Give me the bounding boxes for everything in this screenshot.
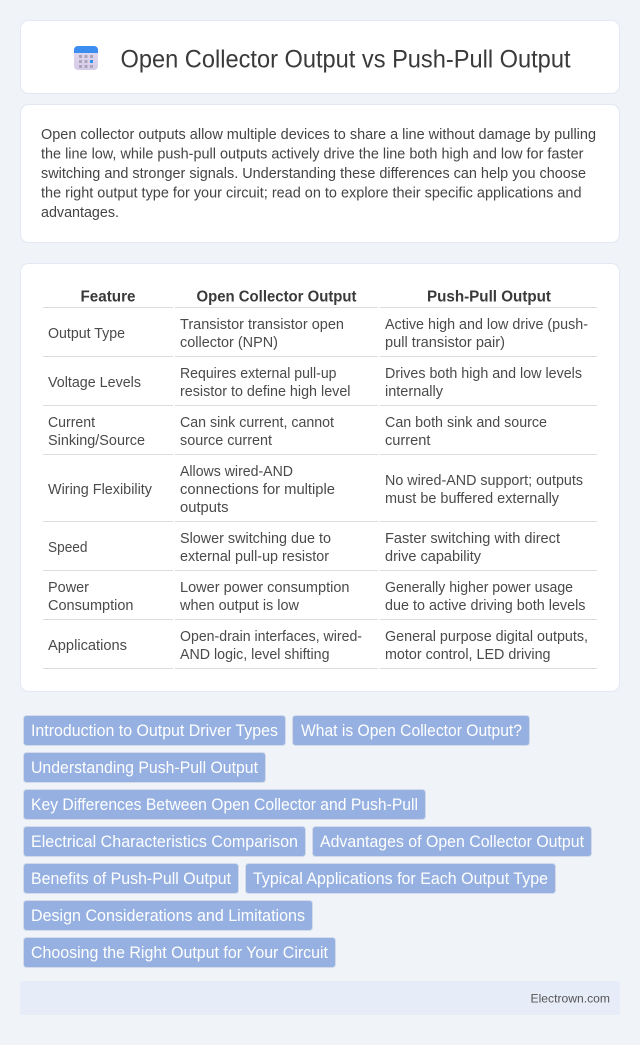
row: Speed bbox=[48, 531, 560, 565]
footer: Electrown.com bbox=[530, 992, 610, 1006]
row: Applications: Open-drain interfaces, wired- bbox=[180, 629, 362, 645]
chip: What is Open Collector bbox=[292, 716, 530, 746]
chip: Typical Applications: Typical Applications for Each Output Type bbox=[253, 870, 548, 888]
panel: title header bbox=[20, 20, 620, 94]
intro paragraph: switching and stronger signals. Understanding these differences can help you choose bbox=[41, 166, 586, 182]
title: Open Collector Output vs Push-Pull Output bbox=[120, 46, 571, 74]
table header row: Push-Pull Output bbox=[427, 288, 551, 306]
chip: Advantages: Advantages of Open Collector Output bbox=[320, 833, 584, 851]
intro paragraph bbox=[41, 127, 596, 221]
icon: calendar grid bbox=[74, 46, 98, 70]
row: Wiring Flexibility: must be buffered externally bbox=[385, 491, 560, 507]
panel: topic chips bbox=[24, 716, 592, 968]
row: Voltage Levels: Drives both high and low levels bbox=[385, 366, 582, 382]
chip: What is Open Collector: What is Open Collector Output? bbox=[301, 722, 522, 740]
chip: Understanding Push-Pull bbox=[24, 752, 266, 782]
chip: Design Considerations bbox=[24, 900, 312, 930]
chip: Choosing the Right Output bbox=[24, 938, 336, 968]
chip: Introduction: Introduction to Output Driver Types bbox=[31, 722, 278, 740]
row: Current Sinking/Source: Current bbox=[48, 415, 95, 431]
panel: introduction bbox=[20, 104, 620, 242]
row: Power Consumption: when output is low bbox=[179, 598, 300, 614]
row: Applications: motor control, LED driving bbox=[385, 647, 550, 663]
row: Voltage Levels: resistor to define high level bbox=[180, 384, 350, 400]
chip: Choosing the Right Output: Choosing the Right Output for Your Circuit bbox=[31, 944, 328, 962]
row: Wiring Flexibility: outputs bbox=[180, 500, 228, 516]
row: Voltage Levels: internally bbox=[385, 384, 444, 400]
row: Current Sinking/Source: Sinking/Source bbox=[48, 433, 145, 449]
chip: Design Considerations: Design Considerations and Limitations bbox=[31, 907, 305, 925]
row: Wiring Flexibility: Allows wired-AND bbox=[180, 464, 293, 480]
row: Applications: General purpose digital outputs, bbox=[385, 629, 588, 645]
panel: comparison table bbox=[20, 264, 620, 692]
row: Speed: Slower switching due to bbox=[180, 531, 331, 547]
row: Current Sinking/Source: Can both sink and source bbox=[385, 415, 547, 431]
row: Power Consumption: due to active driving both levels bbox=[385, 598, 586, 614]
intro paragraph: Open collector outputs allow multiple devices to share a line without damage by pulling bbox=[41, 127, 596, 143]
row: Power Consumption: Power bbox=[48, 580, 89, 596]
row: Speed: Faster switching with direct bbox=[385, 531, 560, 547]
row: Output Type: Active high and low drive (push- bbox=[385, 317, 588, 333]
footer bbox=[20, 981, 620, 1015]
chip: Electrical Characteristics: Electrical Characteristics Comparison bbox=[31, 833, 298, 851]
chip: Advantages bbox=[312, 826, 592, 856]
intro paragraph: advantages. bbox=[41, 205, 119, 221]
row: Output Type: collector (NPN) bbox=[180, 335, 278, 351]
row: Voltage Levels bbox=[48, 366, 582, 400]
row: Output Type: Transistor transistor open bbox=[180, 317, 344, 333]
row: Output Type bbox=[48, 317, 588, 351]
row: Wiring Flexibility bbox=[48, 464, 583, 516]
chip: Key Differences: Key Differences Between Open Collector and Push-Pull bbox=[31, 796, 418, 814]
chip: Benefits: Benefits of Push-Pull Output bbox=[31, 870, 231, 888]
row: Voltage Levels: Voltage Levels bbox=[48, 375, 141, 391]
row: Voltage Levels: Requires external pull-up bbox=[180, 366, 336, 382]
row: Power Consumption: Consumption bbox=[48, 598, 134, 614]
row: Speed: external pull-up resistor bbox=[180, 549, 329, 565]
row: Speed: drive capability bbox=[385, 549, 482, 565]
row: Power Consumption bbox=[48, 580, 586, 614]
row: Power Consumption: Lower power consumption bbox=[180, 580, 350, 596]
row: Current Sinking/Source: source current bbox=[180, 433, 272, 449]
chip: Benefits bbox=[24, 864, 238, 894]
chip: Electrical Characteristics bbox=[24, 826, 306, 856]
row: Wiring Flexibility: connections for multiple bbox=[180, 482, 335, 498]
row: Speed: Speed bbox=[48, 540, 88, 556]
row: Wiring Flexibility: Wiring Flexibility bbox=[48, 482, 153, 498]
chip: Key Differences bbox=[24, 790, 426, 820]
row: Wiring Flexibility: No wired-AND support; outputs bbox=[385, 473, 583, 489]
row: Current Sinking/Source: Can sink current, cannot bbox=[180, 415, 334, 431]
intro paragraph: the right output type for your circuit; read on to explore their specific applications and bbox=[41, 186, 582, 202]
intro paragraph: the line low, while push-pull outputs actively drive the line both high and low for faster bbox=[41, 146, 584, 162]
chip: Typical Applications bbox=[246, 864, 556, 894]
row: Power Consumption: Generally higher power usage bbox=[385, 580, 573, 596]
table header row: Feature bbox=[80, 288, 136, 306]
chip: Introduction bbox=[24, 716, 286, 746]
row: Applications bbox=[48, 629, 588, 663]
chip: Understanding Push-Pull: Understanding Push-Pull Output bbox=[31, 759, 258, 777]
row: Applications: Applications bbox=[48, 638, 127, 654]
row: Current Sinking/Source: current bbox=[385, 433, 430, 449]
table header row bbox=[80, 288, 551, 306]
row: Applications: AND logic, level shifting bbox=[180, 647, 330, 663]
row: Current Sinking/Source bbox=[48, 415, 547, 449]
row: Output Type: pull transistor pair) bbox=[385, 335, 505, 351]
row: Output Type: Output Type bbox=[48, 326, 125, 342]
table header row: Open Collector Output bbox=[196, 288, 356, 306]
